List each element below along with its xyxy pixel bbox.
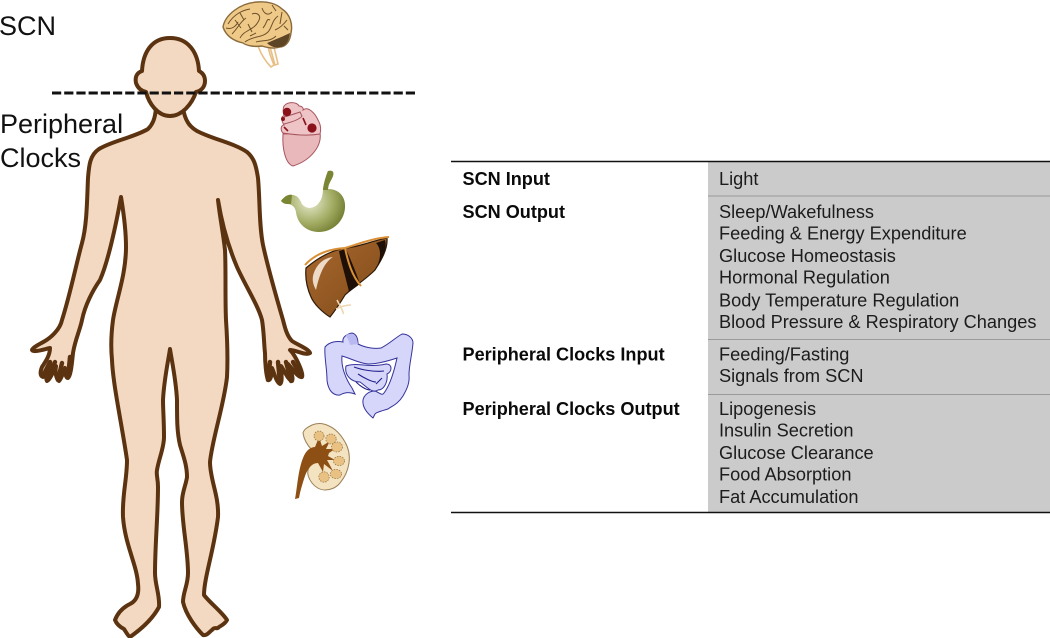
icon: kidney <box>295 424 349 499</box>
row: peripheral clocks output: Glucose Clearance <box>719 443 874 463</box>
row: SCN input: Light <box>719 169 758 189</box>
row: SCN output: Sleep/Wakefulness <box>719 202 874 222</box>
body figure <box>32 38 310 637</box>
row: peripheral clocks output <box>462 399 874 507</box>
row: peripheral clocks input: Feeding/Fasting <box>719 344 849 364</box>
heading: SCN: SCN <box>0 11 56 41</box>
row: peripheral clocks output: Fat Accumulation <box>719 487 859 507</box>
table: clock inputs and outputs <box>451 162 1050 512</box>
row: SCN output: Feeding & Energy Expenditure <box>719 224 967 244</box>
row: SCN output: Glucose Homeostasis <box>719 246 896 266</box>
row: peripheral clocks output: Lipogenesis <box>719 399 816 419</box>
row: SCN input <box>462 169 758 189</box>
heading: Peripheral Clocks: Peripheral <box>0 109 123 139</box>
icon: stomach <box>281 171 345 232</box>
row: peripheral clocks output: Food Absorption <box>719 464 851 484</box>
row: SCN output: Hormonal Regulation <box>719 268 890 288</box>
icon: liver <box>305 237 389 317</box>
row: peripheral clocks input: Signals from SCN <box>719 366 864 386</box>
row: SCN output: Blood Pressure & Respiratory Changes <box>719 312 1036 332</box>
row: SCN output: SCN Output <box>462 202 565 222</box>
dashed divider between SCN and peripheral clocks <box>52 92 415 94</box>
heading: Peripheral Clocks <box>0 109 123 173</box>
row: SCN output: Body Temperature Regulation <box>719 290 959 310</box>
row: peripheral clocks output: Peripheral Clocks Output <box>462 399 680 419</box>
row: peripheral clocks input <box>462 344 864 386</box>
icon: brain <box>223 2 292 67</box>
row: peripheral clocks output: Insulin Secretion <box>719 420 853 440</box>
row: SCN input: SCN Input <box>462 169 550 189</box>
heading: Peripheral Clocks: Clocks <box>0 143 81 173</box>
icon: intestines <box>325 333 413 418</box>
grey value column <box>708 162 1050 512</box>
row: peripheral clocks input: Peripheral Clocks Input <box>462 344 665 364</box>
icon: heart <box>281 103 321 166</box>
row: SCN output <box>462 202 1036 332</box>
